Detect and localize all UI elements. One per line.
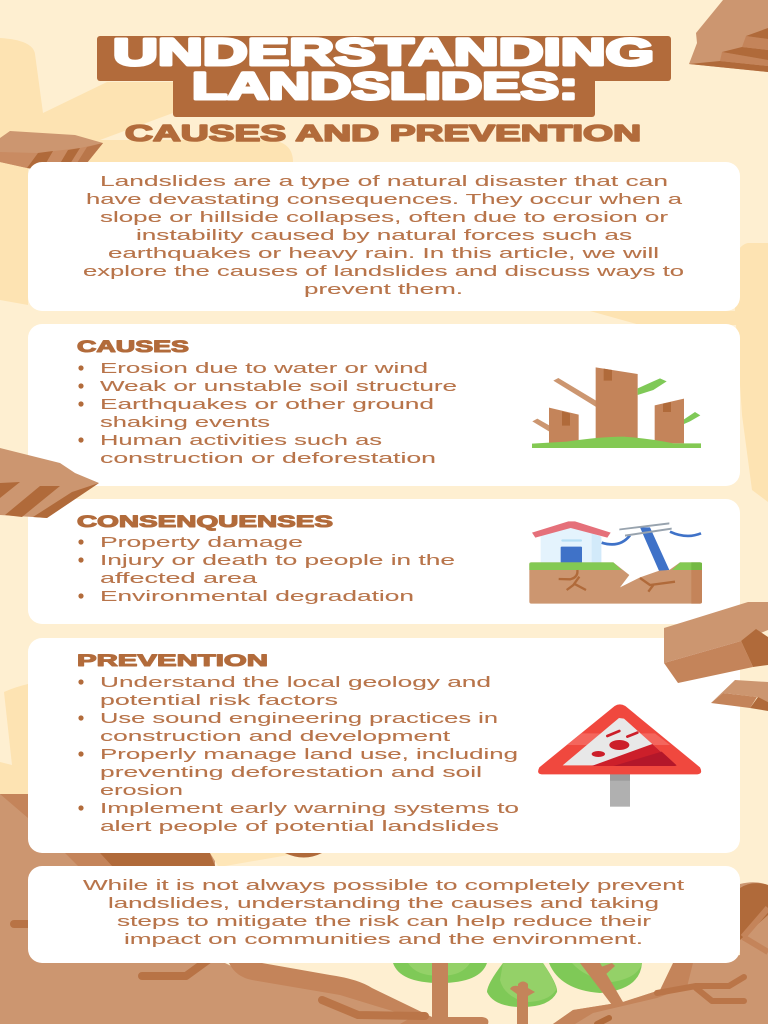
panel: introduction: explore the causes of landslides and discuss ways to — [83, 263, 684, 280]
panel: introduction: Landslides are a type of natural disaster that can — [100, 173, 668, 190]
bullet list: prevention: erosion — [100, 782, 183, 799]
bullet list: prevention: Use sound engineering practices in — [100, 710, 498, 727]
subtitle: CAUSES AND PREVENTION — [125, 120, 641, 146]
background: ground and roots at the bottom — [0, 794, 768, 1024]
heading: consequences: Consenquenses — [77, 506, 333, 533]
trees at the bottom — [393, 963, 642, 1024]
rock: middle left — [0, 448, 99, 518]
bullet list: prevention — [78, 674, 519, 835]
panel: consequences — [28, 499, 740, 624]
panel: introduction: slope or hillside collapses, often due to erosion or — [100, 209, 668, 226]
panel: conclusion: While it is not always possible to completely prevent — [83, 877, 685, 894]
heading: prevention: Prevention — [77, 645, 268, 672]
bullet list: causes: Weak or unstable soil structure — [100, 378, 457, 395]
rock: top right — [689, 0, 768, 72]
bullet list: prevention: alert people of potential landslides — [100, 818, 499, 835]
rock: right small — [711, 680, 768, 711]
bullet list: causes: Earthquakes or other ground — [100, 396, 434, 413]
rock: upper left — [0, 131, 103, 172]
panel: introduction: earthquakes or heavy rain. In this article, we will — [108, 245, 659, 262]
icon: landslide warning sign — [538, 704, 701, 807]
bullet list: prevention: construction and development — [100, 728, 451, 745]
panel: introduction: have devastating consequences. They occur when a — [86, 191, 683, 208]
bullet list: consequences — [78, 534, 455, 605]
panel: conclusion: impact on communities and the environment. — [124, 931, 643, 948]
bullet list: prevention: preventing deforestation and soil — [100, 764, 482, 781]
bullet list: prevention: Properly manage land use, including — [100, 746, 518, 763]
bullet list: causes: Erosion due to water or wind — [100, 360, 428, 377]
bullet list: causes: shaking events — [100, 414, 270, 431]
icon: cut tree stumps — [532, 367, 701, 448]
panel: conclusion: steps to mitigate the risk can help reduce their — [117, 913, 651, 930]
bullet list: causes: construction or deforestation — [100, 450, 436, 467]
title banner — [97, 32, 671, 117]
title banner: LANDSLIDES: — [192, 66, 578, 108]
panel: introduction: instability caused by natural forces such as — [136, 227, 632, 244]
panel: introduction — [28, 162, 740, 311]
bullet list: prevention: Implement early warning systems to — [100, 800, 519, 817]
rock: right large — [664, 602, 768, 683]
bullet list: consequences: Property damage — [100, 534, 303, 551]
panel: conclusion — [28, 866, 740, 963]
panel: causes — [28, 324, 740, 486]
panel: conclusion: landslides, understanding the causes and taking — [108, 895, 659, 912]
bullet list: prevention: Understand the local geology and — [100, 674, 491, 691]
bullet list: causes — [78, 360, 457, 467]
panel: prevention — [28, 638, 740, 853]
bullet list: consequences: Injury or death to people in the — [100, 552, 455, 569]
background: pale hills — [0, 38, 768, 800]
title banner: UNDERSTANDING — [113, 32, 654, 74]
icon: damaged house and power pole — [529, 521, 702, 604]
bullet list: consequences: Environmental degradation — [100, 588, 414, 605]
bullet list: consequences: affected area — [100, 570, 258, 587]
bullet list: causes: Human activities such as — [100, 432, 382, 449]
heading: causes: Causes — [77, 331, 189, 358]
bullet list: prevention: potential risk factors — [100, 692, 338, 709]
panel: introduction: prevent them. — [304, 281, 463, 298]
